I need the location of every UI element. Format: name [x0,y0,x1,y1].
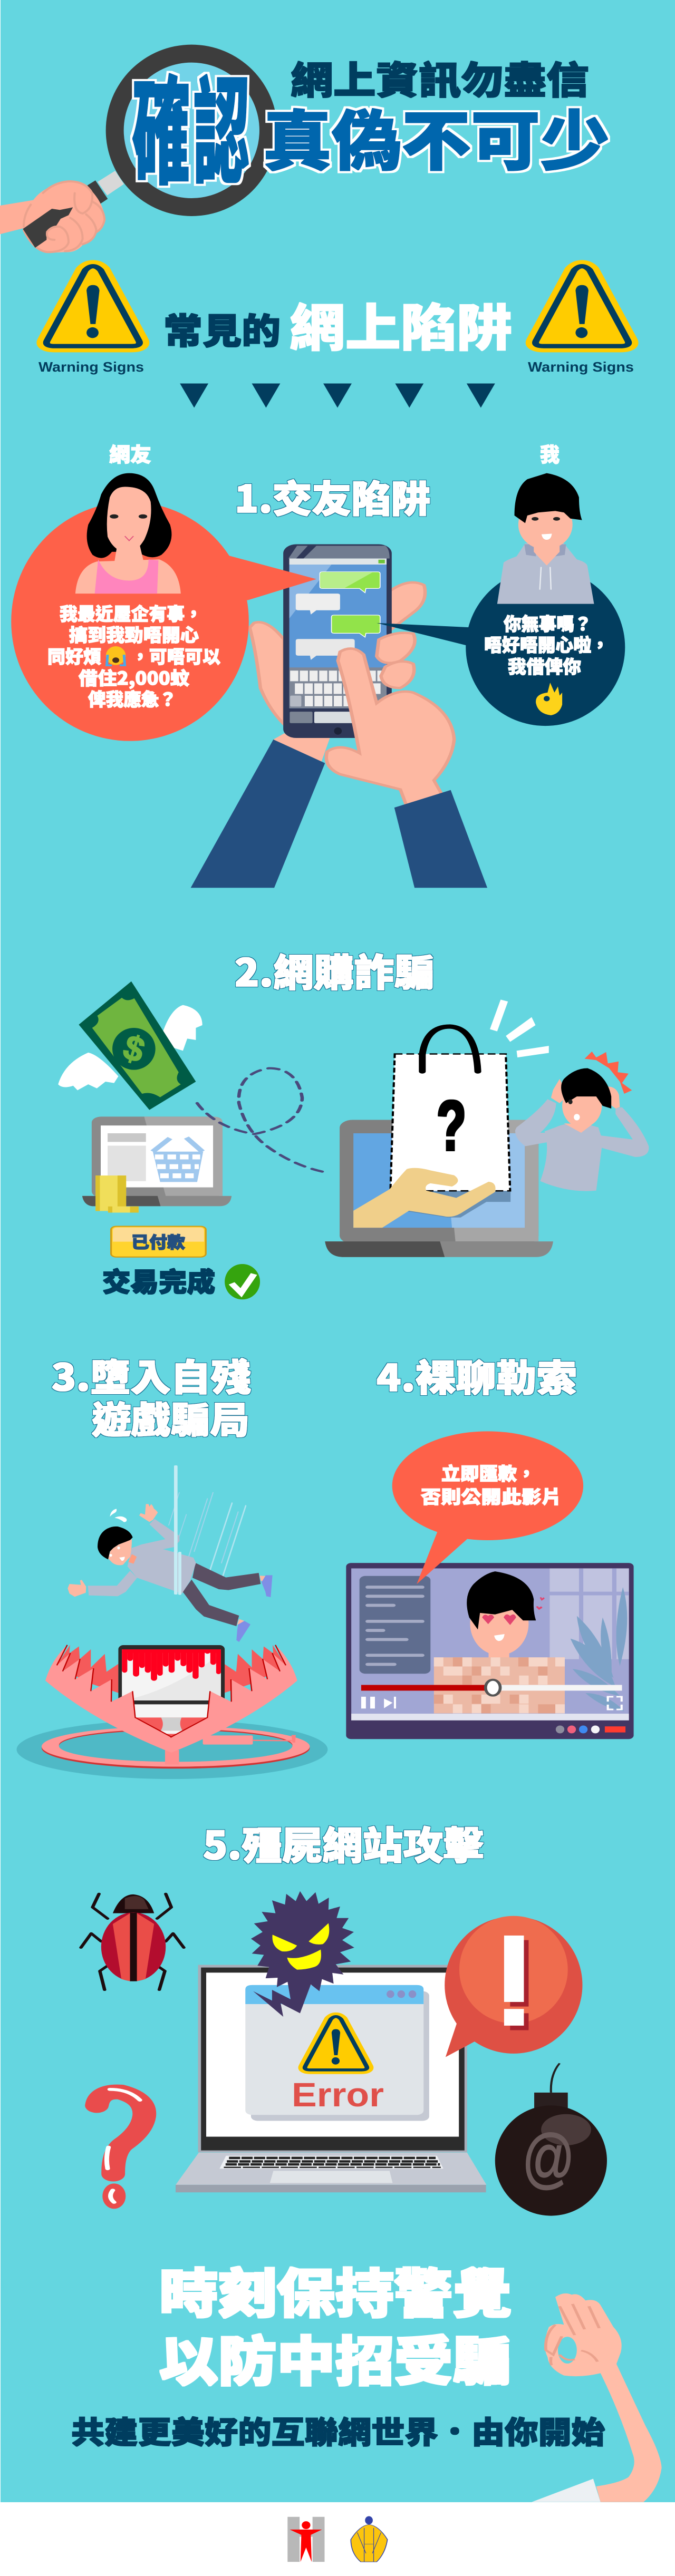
icon: virus monster [251,1891,354,2017]
panel: footer logos [0,2502,675,2576]
text: friend message [47,600,220,711]
icon: magnifying glass with hand [0,45,277,253]
icon: exclamation speech bubble [445,1916,582,2057]
text: friend message: 同好煩 [47,643,101,668]
label: 網友: 網友 [109,439,151,468]
icon: left warning sign [46,266,139,346]
text: my reply [484,610,609,678]
icon: small warning sign [305,2017,367,2070]
illustration: shopping laptop [82,1116,232,1213]
text: my reply: 我借俾你 [508,653,581,678]
logo: government department [287,2517,324,2562]
header panel: 認 [194,38,249,208]
icon: dollar sign: $ [119,1027,149,1070]
title line 2: 真偽不可少 [263,89,610,183]
icon: bomb [495,2063,607,2216]
icon: at sign on bomb: @ [522,2122,575,2195]
text: friend message: 我最近屋企有事， [60,600,202,626]
heading: 網上陷阱: 網上陷阱 [290,287,512,361]
button: paid [111,1227,206,1257]
panel: 3 self-harm game scam [16,1348,634,1779]
illustration: falling man [68,1465,273,1642]
illustration: woman [75,473,181,594]
panel: 1 friendship trap [11,439,625,888]
heading: 5: 5.殭屍網站攻擊 [203,1815,484,1871]
icon: green check [225,1264,260,1299]
text: stay alert line 2: 以防中招受騙 [159,2319,512,2396]
illustration: man in hoodie [497,473,594,604]
heading: 3 line 1: 3.墮入自殘 [52,1348,251,1402]
illustration: hand holding phone [191,545,487,888]
icon: crying emoji [106,646,126,665]
text: tagline: 共建更美好的互聯網世界．由你開始 [71,2408,605,2452]
icon: question mark [97,2089,144,2209]
icon: beetle [81,1894,184,1990]
heading: 常見的: 常見的 [163,303,281,354]
panel: 5 zombie website attack [81,1815,607,2216]
icon: question mark on bag: ? [437,1086,466,1165]
header panel [0,38,610,253]
warning label right: Warning Signs [528,359,634,375]
text: blackmail message: 否則公開此影片 [421,1483,562,1509]
text: friend message: 俾我應急？ [88,685,177,711]
arrows: down triangles [180,384,495,407]
warning label left: Warning Signs [38,359,144,375]
label: 我: 我 [540,439,560,468]
panel: 2 online shopping fraud [58,942,649,1299]
icon: OK hand emoji [536,683,562,715]
label: Error: Error [292,2076,384,2114]
text: my reply: 你無事嗎？ [504,610,592,636]
text: stay alert line 1: 時刻保持警覺 [159,2251,512,2328]
heading: 2: 2.網購詐騙 [235,942,435,997]
heading: 3 line 2: 遊戲騙局 [92,1391,249,1444]
text: blackmail message: 立即匯款， [441,1460,536,1485]
icon: right warning sign [536,266,629,346]
heading: 1: 1.交友陷阱 [235,470,430,523]
arrow: dashed flight path [197,1068,323,1172]
illustration: large laptop with mystery bag [325,1026,553,1257]
callout: blackmail speech bubble [392,1431,583,1584]
text: friend message: ，可唔可以 [131,643,220,668]
heading: 4: 4.裸聊勒索 [377,1349,577,1402]
callout: my speech bubble [377,568,625,726]
callout: friend speech bubble [11,502,316,741]
panel: closing message [71,2251,662,2502]
illustration: laptop with error window [176,1965,486,2192]
logo: police emblem [351,2516,388,2562]
label: 交易完成: 交易完成 [102,1261,215,1299]
text: friend message: 搞到我勁唔開心 [69,621,199,647]
icon: flying money [58,981,202,1110]
text: blackmail message [421,1460,562,1509]
text: my reply: 唔好唔開心啦， [484,631,609,657]
title line 1: 網上資訊勿盡信 [291,50,589,105]
panel: common traps heading [38,266,634,407]
label: 已付款: 已付款 [131,1229,185,1253]
illustration: worried man [515,1052,649,1191]
footer background [0,2502,675,2576]
illustration: shock lines [490,999,549,1057]
illustration: OK hand arm [532,2293,662,2502]
text: friend message: 借住2,000蚊 [79,664,189,690]
illustration: video chat window [346,1563,634,1739]
header panel: 確 [132,38,190,208]
illustration: bear trap with monitor [16,1645,327,1779]
